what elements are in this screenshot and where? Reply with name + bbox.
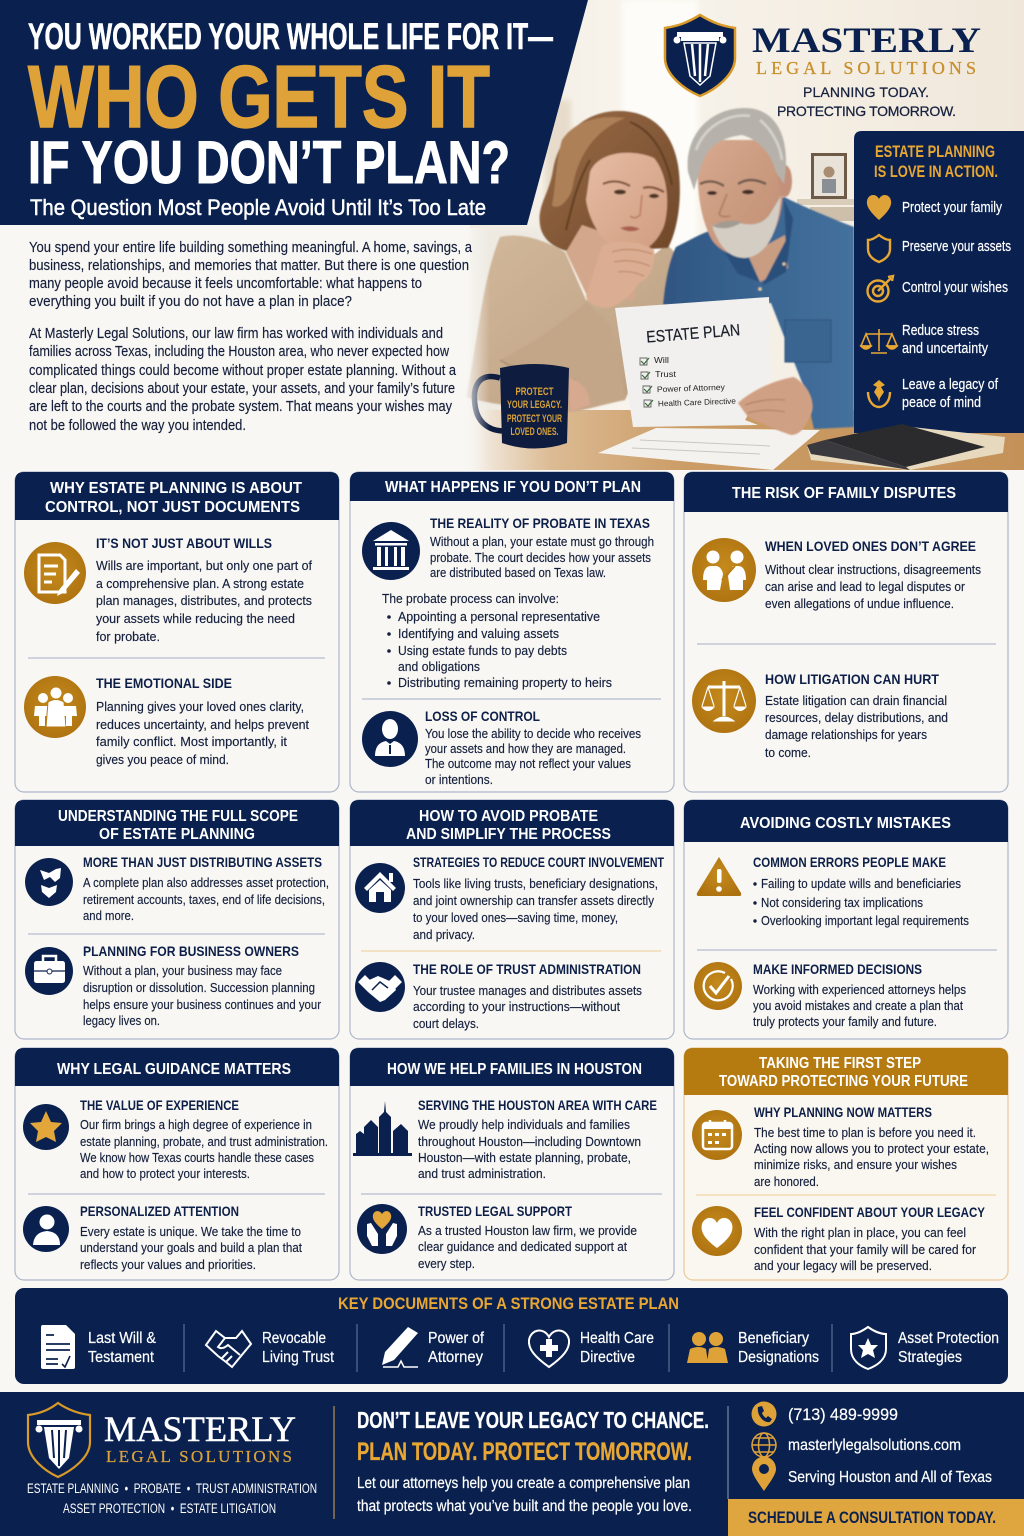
panel: why estate planning is about control (15, 472, 339, 792)
photo: couple reviewing estate plan at table (460, 0, 1024, 470)
panel: what happens if you don't plan: THE REALITY OF PROBATE IN TEXAS (430, 515, 650, 531)
woman: face (586, 153, 667, 253)
mug with slogan (474, 364, 569, 448)
panel: what happens if you don't plan: The outcome may not reflect your values (425, 756, 631, 771)
footer: masterlylegalsolutions.com (788, 1437, 961, 1454)
panel: taking the first step: confident that your family will be cared for (754, 1242, 977, 1257)
panel: why estate planning is about control: WHY ESTATE PLANNING IS ABOUT (50, 480, 302, 497)
footer: (713) 489-9999 (788, 1405, 898, 1424)
panel: why estate planning is about control: Wills are important, but only one part of (96, 558, 312, 573)
icon: pen signing (382, 1327, 418, 1367)
estate plan document held by man: Health Care Directive (658, 397, 737, 408)
panel: taking the first step: TAKING THE FIRST STEP (759, 1055, 921, 1072)
title line 1: YOU WORKED YOUR WHOLE LIFE FOR IT— (28, 16, 553, 57)
panel: how to avoid probate: according to your instructions—without (413, 999, 620, 1014)
panel: how we help families in houston: As a trusted Houston law firm, we provide (418, 1223, 637, 1238)
panel: how we help families in houston: every step. (418, 1256, 475, 1271)
panel: risk of family disputes: damage relationships for years (765, 727, 927, 742)
panel: why legal guidance matters: Every estate is unique. We take the time to (80, 1224, 301, 1239)
panel: why estate planning is about control: your assets while reducing the need (96, 611, 295, 626)
panel: understanding the full scope: UNDERSTANDING THE FULL SCOPE (58, 808, 298, 825)
panel: what happens if you don't plan: LOSS OF CONTROL (425, 708, 540, 724)
footer logo (27, 1403, 317, 1516)
panel: what happens if you don't plan: probate. The court decides how your assets (430, 550, 651, 565)
panel: why estate planning is about control: Planning gives your loved ones clarity, (96, 699, 304, 714)
panel: what happens if you don't plan: are distributed based on Texas law. (430, 565, 606, 580)
panel: risk of family disputes: can arise and lead to legal disputes or (765, 579, 966, 594)
panel: understanding the full scope: Without a plan, your business may face (83, 963, 282, 978)
probate bullet list: Identifying and valuing assets (398, 626, 559, 641)
icon: checkmark (694, 962, 742, 1010)
panel: risk of family disputes: even allegations of undue influence. (765, 596, 954, 611)
estate plan document held by man (615, 297, 771, 427)
panel: why legal guidance matters (15, 1048, 339, 1280)
probate bullet list: and obligations (398, 659, 480, 674)
footer logo: MASTERLY (104, 1409, 296, 1449)
panel: estate planning is love in action: Leave a legacy of (902, 377, 999, 393)
panel: understanding the full scope (15, 800, 339, 1039)
mug with slogan: PROTECT YOUR (507, 413, 562, 425)
panel: how we help families in houston: throughout Houston—including Downtown (418, 1134, 641, 1149)
panel: risk of family disputes: HOW LITIGATION CAN HURT (765, 671, 939, 687)
panel: risk of family disputes: to come. (765, 745, 811, 760)
icon: hands holding heart (357, 1204, 407, 1254)
estate plan document held by man: Power of Attorney (657, 383, 725, 394)
notebook on table (807, 424, 1005, 470)
estate plan document held by man: Trust (655, 369, 677, 379)
common errors bullet list: Not considering tax implications (761, 895, 923, 910)
footer call to action text (357, 1407, 709, 1515)
panel: key documents band: Designations (738, 1349, 819, 1366)
mug with slogan: YOUR LEGACY. (507, 399, 562, 411)
panel: how to avoid probate: Tools like living trusts, beneficiary designations, (413, 876, 658, 891)
icon: person with tie (362, 711, 418, 767)
panel: estate planning is love in action: peace of mind (902, 395, 981, 411)
panel: how to avoid probate: THE ROLE OF TRUST ADMINISTRATION (413, 961, 641, 977)
footer call to action text: Let our attorneys help you create a comprehensive plan (357, 1475, 690, 1492)
footer call to action text: PLAN TODAY. PROTECT TOMORROW. (357, 1438, 692, 1466)
panel: how we help families in houston: We proudly help individuals and families (418, 1117, 630, 1132)
panel: why legal guidance matters: THE VALUE OF EXPERIENCE (80, 1097, 239, 1113)
panel: key documents band: Living Trust (262, 1349, 335, 1366)
panel: key documents band: Attorney (428, 1349, 483, 1366)
panel: avoiding costly mistakes: MAKE INFORMED DECISIONS (753, 961, 922, 977)
panel: understanding the full scope: legacy lives on. (83, 1013, 160, 1028)
probate bullet list: Using estate funds to pay debts (398, 643, 567, 658)
icon: heart (867, 195, 891, 220)
panel: how to avoid probate: and joint ownership can transfer assets directly (413, 893, 654, 908)
panel: key documents band: Revocable (262, 1330, 326, 1347)
panel: key documents band: Last Will & (88, 1330, 157, 1347)
panel: why estate planning is about control: THE EMOTIONAL SIDE (96, 675, 232, 691)
icon: house (355, 863, 405, 913)
title line 3: IF YOU DON’T PLAN? (28, 129, 510, 196)
panel: risk of family disputes: Estate litigation can drain financial (765, 693, 947, 708)
panel: what happens if you don't plan: your assets and how they are managed. (425, 741, 626, 756)
estate plan document held by man: ESTATE PLAN (646, 321, 741, 347)
picture frame on shelf (797, 153, 854, 221)
woman: sleeve (500, 302, 625, 412)
common errors bullet list: Overlooking important legal requirements (761, 913, 969, 928)
panel: how to avoid probate: Your trustee manages and distributes assets (413, 983, 642, 998)
icon: handshake (355, 962, 405, 1012)
intro text: are left to the courts and the probate system. That means your wishes may (29, 399, 453, 415)
common errors bullet list: Failing to update wills and beneficiaries (761, 876, 961, 891)
man: shirt (663, 197, 854, 429)
title line 2: WHO GETS IT (28, 47, 490, 146)
icon: calendar (692, 1110, 742, 1160)
panel: why legal guidance matters: and how to protect your interests. (80, 1166, 250, 1181)
man's hand holding document (738, 377, 813, 435)
icon: scales of justice (692, 669, 756, 733)
woman: hand under chin (586, 242, 654, 308)
panel: why estate planning is about control: family conflict. Most importantly, it (96, 734, 287, 749)
panel: why estate planning is about control: a comprehensive plan. A strong estate (96, 576, 304, 591)
icon: shield with column (665, 15, 735, 96)
panel: key documents band: Power of (428, 1330, 485, 1347)
panel: why estate planning is about control: CONTROL, NOT JUST DOCUMENTS (45, 499, 300, 516)
man: beard (712, 196, 781, 258)
footer logo: ASSET PROTECTION • ESTATE LITIGATION (63, 1501, 276, 1516)
panel: why legal guidance matters: estate planning, probate, and trust administration. (80, 1134, 328, 1149)
icon: heart with cross (529, 1331, 569, 1367)
panel: estate planning is love in action: and uncertainty (902, 341, 989, 357)
panel: risk of family disputes: THE RISK OF FAMILY DISPUTES (732, 485, 956, 502)
icon: globe (752, 1433, 776, 1457)
footer logo: ESTATE PLANNING • PROBATE • TRUST ADMINISTRATION (27, 1481, 317, 1496)
panel: how we help families in houston: HOW WE HELP FAMILIES IN HOUSTON (387, 1061, 642, 1078)
icon: arguing people (692, 538, 756, 602)
panel: how we help families in houston: and trust administration. (418, 1166, 546, 1181)
header banner (0, 0, 588, 225)
panel: key documents band: Strategies (898, 1349, 962, 1366)
panel: taking the first step: minimize risks, and ensure your wishes (754, 1157, 957, 1172)
panel: how to avoid probate: and privacy. (413, 927, 475, 942)
panel: key documents band: KEY DOCUMENTS OF A STRONG ESTATE PLAN (338, 1294, 679, 1313)
consultation button (728, 1499, 1024, 1536)
panel: why estate planning is about control: gives you peace of mind. (96, 752, 229, 767)
intro text: clear plan, decisions about your estate, your assets, and your family’s future (29, 381, 455, 397)
icon: shield (868, 235, 890, 262)
panel: risk of family disputes (684, 472, 1008, 792)
panel: taking the first step: TOWARD PROTECTING YOUR FUTURE (719, 1073, 968, 1090)
top logo: PLANNING TODAY. (803, 84, 929, 100)
panel: taking the first step: The best time to plan is before you need it. (754, 1125, 976, 1140)
intro text: business, relationships, and memories that matter. But there is one question (29, 258, 469, 274)
panel: key documents band: Asset Protection (898, 1330, 999, 1347)
top logo (665, 15, 981, 119)
panel: taking the first step: Acting now allows you to protect your estate, (754, 1141, 989, 1156)
icon: will document (41, 1325, 75, 1369)
icon: houston skyline (353, 1101, 412, 1156)
panel: what happens if you don't plan: or intentions. (425, 772, 493, 787)
icon: beneficiaries (687, 1332, 728, 1363)
panel: understanding the full scope: PLANNING FOR BUSINESS OWNERS (83, 943, 299, 959)
panel: how we help families in houston (350, 1048, 674, 1280)
panel: risk of family disputes: WHEN LOVED ONES DON’T AGREE (765, 538, 976, 554)
icon: phone (752, 1402, 776, 1426)
woman: hair (540, 111, 680, 253)
icon: person (23, 1206, 69, 1252)
icon: handshake outline (206, 1331, 251, 1367)
top logo: PROTECTING TOMORROW. (777, 103, 956, 119)
estate plan paper on table (598, 428, 820, 470)
panel: key documents band (15, 1288, 1008, 1384)
icon: scales (861, 329, 897, 353)
icon: document and pen (24, 542, 86, 604)
top logo: MASTERLY (752, 20, 981, 60)
footer call to action text: that protects what you’ve built and the people you love. (357, 1498, 692, 1515)
panel: estate planning is love in action: Reduce stress (902, 323, 979, 339)
top logo: LEGAL SOLUTIONS (756, 58, 976, 78)
panel: avoiding costly mistakes (684, 800, 1008, 1039)
panel: taking the first step: and your legacy will be preserved. (754, 1258, 932, 1273)
probate bullet list (387, 609, 612, 690)
panel: what happens if you don't plan: WHAT HAPPENS IF YOU DON’T PLAN (385, 479, 641, 496)
intro text: complicated things could become without proper estate planning. Without a (29, 363, 457, 379)
table (460, 410, 1024, 470)
panel: key documents band: Testament (88, 1349, 155, 1366)
panel: avoiding costly mistakes: AVOIDING COSTLY MISTAKES (740, 815, 951, 832)
intro text: many people avoid because it feels uncomfortable: what happens to (29, 276, 422, 292)
panel: risk of family disputes: Without clear instructions, disagreements (765, 562, 981, 577)
estate plan document held by man: Will (654, 355, 669, 365)
panel: risk of family disputes: resources, delay distributions, and (765, 710, 948, 725)
panel: why estate planning is about control: IT’S NOT JUST ABOUT WILLS (96, 535, 272, 551)
panel: understanding the full scope: A complete plan also addresses asset protection, (83, 875, 329, 890)
panel: understanding the full scope: and more. (83, 908, 134, 923)
intro text: You spend your entire life building something meaningful. A home, savings, a (29, 240, 473, 256)
intro text: not be followed the way you intended. (29, 418, 246, 434)
common errors bullet list (753, 876, 969, 928)
panel: avoiding costly mistakes: COMMON ERRORS PEOPLE MAKE (753, 854, 946, 870)
panel: avoiding costly mistakes: truly protects your family and future. (753, 1014, 937, 1029)
icon: footer shield (28, 1403, 90, 1477)
panel: why legal guidance matters: WHY LEGAL GUIDANCE MATTERS (57, 1061, 291, 1078)
panel: how to avoid probate: HOW TO AVOID PROBATE (419, 808, 598, 825)
panel: estate planning is love in action (854, 131, 1024, 433)
mug with slogan: LOVED ONES. (510, 426, 558, 438)
panel: taking the first step: are honored. (754, 1174, 819, 1189)
icon: warning triangle (697, 857, 741, 896)
panel: understanding the full scope: MORE THAN JUST DISTRIBUTING ASSETS (83, 854, 322, 870)
icon: shield with star (851, 1327, 886, 1369)
panel: why legal guidance matters: We know how Texas courts handle these cases (80, 1150, 314, 1165)
woman: sweater (466, 235, 680, 408)
icon: legacy hands (868, 380, 890, 407)
panel: why legal guidance matters: PERSONALIZED ATTENTION (80, 1203, 239, 1219)
probate bullet list: Distributing remaining property to heirs (398, 675, 612, 690)
panel: how to avoid probate (350, 800, 674, 1039)
icon: shield with arrow (25, 858, 73, 906)
icon: family (24, 676, 86, 738)
panel: taking the first step: With the right plan in place, you can feel (754, 1225, 966, 1240)
man: hair (688, 108, 786, 190)
panel: how to avoid probate: AND SIMPLIFY THE PROCESS (406, 826, 611, 843)
panel: what happens if you don't plan: Without a plan, your estate must go through (430, 534, 654, 549)
panel: taking the first step: WHY PLANNING NOW MATTERS (754, 1104, 932, 1120)
panel: understanding the full scope: OF ESTATE PLANNING (99, 826, 255, 843)
icon: heart (692, 1206, 742, 1256)
intro text: families across Texas, including the Houston area, who never expected how (29, 344, 449, 360)
panel: how we help families in houston: clear guidance and dedicated support at (418, 1239, 627, 1254)
panel: understanding the full scope: disruption or dissolution. Succession planning (83, 980, 315, 995)
intro text: At Masterly Legal Solutions, our law firm has worked with individuals and (29, 326, 443, 342)
panel: key documents band: Beneficiary (738, 1330, 809, 1347)
panel: why estate planning is about control: plan manages, distributes, and protects (96, 593, 312, 608)
panel: how to avoid probate: STRATEGIES TO REDUCE COURT INVOLVEMENT (413, 854, 664, 870)
footer call to action text: DON’T LEAVE YOUR LEGACY TO CHANCE. (357, 1407, 709, 1433)
panel: why legal guidance matters: reflects your values and priorities. (80, 1257, 256, 1272)
icon: star (23, 1104, 69, 1150)
panel: avoiding costly mistakes: Working with experienced attorneys helps (753, 982, 966, 997)
panel: how we help families in houston: TRUSTED LEGAL SUPPORT (418, 1203, 572, 1219)
panel: why legal guidance matters: Our firm brings a high degree of experience in (80, 1117, 312, 1132)
panel: why legal guidance matters: understand your goals and build a plan that (80, 1240, 302, 1255)
footer (0, 1392, 1024, 1536)
icon: location pin (752, 1456, 776, 1491)
icon: courthouse (362, 522, 420, 580)
footer logo: LEGAL SOLUTIONS (106, 1447, 292, 1466)
panel: avoiding costly mistakes: you avoid mistakes and create a plan that (753, 998, 963, 1013)
intro text: everything you built if you do not have a plan in place? (29, 294, 352, 310)
panel: why estate planning is about control: for probate. (96, 629, 160, 644)
icon: briefcase (25, 947, 73, 995)
panel: how to avoid probate: court delays. (413, 1016, 479, 1031)
man: face (698, 140, 783, 255)
intro text (29, 240, 473, 434)
panel: why estate planning is about control: reduces uncertainty, and helps prevent (96, 717, 309, 732)
panel: how to avoid probate: to your loved ones—saving time, money, (413, 910, 618, 925)
panel: what happens if you don't plan (350, 472, 674, 792)
subtitle: The Question Most People Avoid Until It’s Too Late (30, 195, 486, 220)
panel: what happens if you don't plan: You lose the ability to decide who receives (425, 726, 641, 741)
panel: how we help families in houston: SERVING THE HOUSTON AREA WITH CARE (418, 1097, 657, 1113)
probate bullet list: Appointing a personal representative (398, 609, 600, 624)
panel: taking the first step (684, 1048, 1008, 1280)
icon: target (868, 276, 893, 302)
footer: Serving Houston and All of Texas (788, 1469, 992, 1486)
panel: understanding the full scope: helps ensure your business continues and your (83, 997, 322, 1012)
panel: estate planning is love in action: Protect your family (902, 200, 1003, 216)
panel: key documents band: Health Care (580, 1330, 654, 1347)
panel: key documents band: Directive (580, 1349, 635, 1366)
mug with slogan: PROTECT (516, 386, 554, 398)
panel: understanding the full scope: retirement accounts, taxes, end of life decisions, (83, 892, 325, 907)
panel: what happens if you don't plan: The probate process can involve: (382, 591, 559, 606)
woman: neck and chest (566, 225, 640, 302)
panel: how we help families in houston: Houston—with estate planning, probate, (418, 1150, 631, 1165)
